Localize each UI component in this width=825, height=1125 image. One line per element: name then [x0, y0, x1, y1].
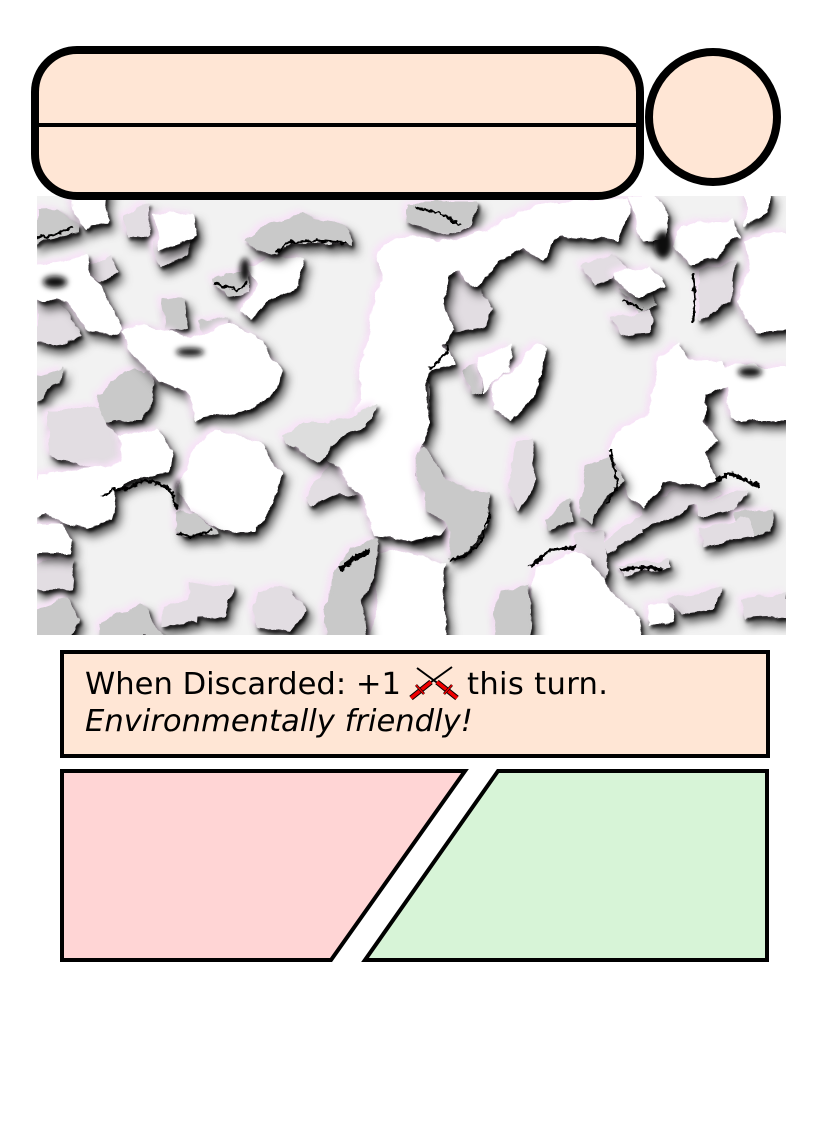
green panel — [365, 771, 767, 960]
lower terrain — [37, 203, 785, 635]
title banner with divider — [35, 50, 640, 196]
jagged cliff lines — [37, 208, 760, 570]
red panel — [62, 771, 465, 960]
white terrain — [37, 190, 790, 640]
rules text panel — [62, 652, 768, 756]
rules text line: When Discarded: +1 — [85, 667, 401, 702]
icon: crossed swords — [411, 667, 457, 698]
map texture illustration — [37, 190, 790, 640]
flavour text: Environmentally friendly! — [85, 704, 473, 739]
raised grey terrain over white — [177, 217, 623, 640]
dark shadow accents — [43, 231, 762, 511]
cost circle — [649, 52, 777, 182]
rules text continuation: this turn. — [467, 667, 608, 702]
